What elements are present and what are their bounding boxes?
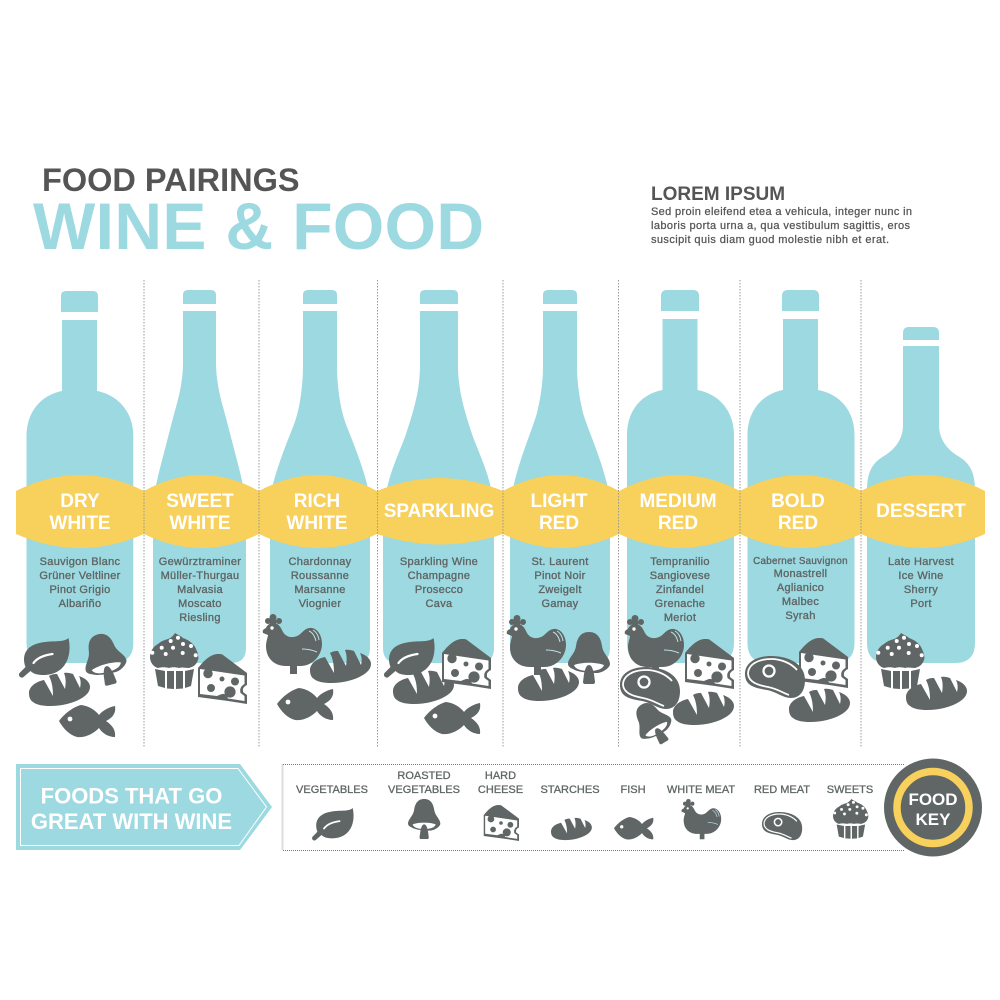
icon: roasted vegetables	[568, 632, 610, 684]
icon: vegetables	[19, 638, 70, 678]
label: WHITE MEAT	[667, 784, 735, 796]
ribbon	[16, 475, 144, 548]
wine list: Sauvigon Blanc	[40, 556, 121, 568]
ribbon label: WHITE	[169, 513, 231, 534]
icon: fish	[277, 688, 333, 720]
icon: red meat	[745, 656, 805, 698]
ribbon	[740, 475, 861, 548]
ribbon	[503, 475, 619, 548]
wine list: Malvasia	[177, 584, 223, 596]
icon: hen	[681, 799, 721, 839]
icon: fish	[614, 817, 653, 840]
icon: leaf	[312, 808, 354, 841]
icon: white meat	[507, 615, 566, 675]
label: CHEESE	[478, 784, 523, 796]
label: FISH	[620, 784, 646, 796]
wine list: Zweigelt	[538, 584, 582, 596]
panel: bold red	[740, 290, 861, 722]
ribbon label: DESSERT	[876, 501, 966, 522]
wine list: Malbec	[782, 596, 819, 608]
wine list: Roussanne	[291, 570, 349, 582]
ribbon label: SPARKLING	[384, 501, 494, 522]
wine list: Zinfandel	[656, 584, 704, 596]
bottle	[627, 290, 734, 663]
ribbon	[144, 475, 259, 548]
key item: roasted vegetables	[388, 770, 460, 839]
icon: hard cheese	[198, 654, 247, 704]
wine list: Port	[910, 598, 932, 610]
key item: starches	[540, 784, 600, 840]
icon: hard cheese	[442, 639, 491, 689]
wine list: Albariño	[59, 598, 101, 610]
wine list: Ice Wine	[898, 570, 944, 582]
ribbon label: RICH	[294, 491, 340, 512]
key item: white meat	[667, 784, 735, 839]
wine list: Riesling	[179, 612, 221, 624]
wine list: Syrah	[785, 610, 816, 622]
arrow text: FOODS THAT GO	[41, 784, 222, 808]
panel: sweet white	[144, 290, 259, 704]
wine list: Sherry	[904, 584, 938, 596]
wine list: Meriot	[664, 612, 696, 624]
wine list: Sangiovese	[650, 570, 710, 582]
ribbon label: RED	[778, 513, 818, 534]
icon: muffin	[833, 799, 868, 839]
wine list: Aglianico	[777, 582, 824, 594]
ribbon label: WHITE	[286, 513, 348, 534]
icon: sweets	[876, 633, 924, 689]
badge yellow ring	[897, 772, 969, 844]
panel: food key	[282, 764, 905, 850]
icon: starches	[393, 671, 454, 704]
badge text: KEY	[916, 810, 951, 829]
wine list: Gewürztraminer	[159, 556, 241, 568]
label: ROASTED	[397, 770, 451, 782]
bottle	[383, 290, 494, 663]
icon: white meat	[263, 614, 322, 674]
heading: food pairings: FOOD PAIRINGS	[42, 162, 300, 198]
icon: roasted vegetables	[626, 695, 680, 752]
icon: steak	[762, 812, 802, 840]
bottle	[510, 290, 610, 663]
icon: hard cheese	[685, 639, 734, 689]
wine list: Viognier	[299, 598, 341, 610]
icon: white meat	[625, 615, 684, 675]
arrow inner line	[20, 768, 266, 846]
icon: bread	[551, 818, 592, 840]
key item: hard cheese	[478, 770, 523, 841]
panel: dessert	[861, 327, 985, 710]
panel: light red	[503, 290, 619, 701]
label: STARCHES	[540, 784, 600, 796]
bottle	[26, 291, 133, 663]
arrow shape	[16, 764, 272, 850]
key item: fish	[614, 784, 653, 840]
icon: starches	[789, 689, 850, 722]
key item: sweets	[827, 784, 873, 839]
icon: starches	[518, 668, 579, 701]
icon: cheese	[484, 805, 519, 841]
arrow text: GREAT WITH WINE	[31, 809, 232, 834]
wine list: Late Harvest	[888, 556, 954, 568]
ribbon	[861, 475, 985, 548]
wine list: Cabernet Sauvignon	[753, 556, 848, 567]
wine list: Pinot Noir	[534, 570, 586, 582]
intro paragraph: Sed proin eleifend etea a vehicula, integer nunc in	[651, 206, 912, 218]
ribbon	[259, 475, 377, 548]
text block: lorem ipsum	[651, 184, 912, 246]
bottle	[153, 290, 246, 663]
icon: starches	[673, 692, 734, 725]
wine list: Pinot Grigio	[49, 584, 111, 596]
wine list: Müller-Thurgau	[161, 570, 239, 582]
icon: starches	[310, 650, 371, 683]
panel: dry white	[16, 291, 144, 737]
ribbon label: MEDIUM	[639, 491, 717, 512]
icon: fish	[424, 702, 480, 734]
icon: starches	[29, 673, 90, 706]
bottle	[867, 327, 975, 663]
icon: hard cheese	[799, 638, 848, 688]
intro paragraph: laboris porta urna a, qua vestibulum sagittis, eros	[651, 220, 910, 232]
icon: red meat	[620, 667, 680, 709]
icon: roasted vegetables	[77, 629, 132, 690]
wine list: Marsanne	[294, 584, 346, 596]
bottle	[270, 290, 370, 663]
icon: starches	[906, 677, 967, 710]
label: SWEETS	[827, 784, 873, 796]
ribbon label: SWEET	[166, 491, 234, 512]
wine list: Sparkling Wine	[400, 556, 478, 568]
label: RED MEAT	[754, 784, 810, 796]
label: HARD	[485, 770, 516, 782]
arrow banner: foods that go great with wine	[16, 764, 272, 850]
wine list: Champagne	[408, 570, 470, 582]
wine list: Chardonnay	[289, 556, 352, 568]
wine list: Monastrell	[774, 568, 827, 580]
wine list: Gamay	[542, 598, 579, 610]
title: wine and food: WINE & FOOD	[33, 189, 484, 263]
icon: fish	[59, 705, 115, 737]
panel: medium red	[619, 290, 740, 752]
panel: rich white	[259, 290, 377, 720]
ribbon	[377, 478, 503, 544]
label: VEGETABLES	[388, 784, 460, 796]
wine list: Tempranilio	[650, 556, 710, 568]
icon: vegetables	[384, 638, 435, 678]
ribbon label: WHITE	[49, 513, 111, 534]
key item: red meat	[754, 784, 810, 840]
key frame	[282, 764, 905, 850]
icon: sweets	[150, 633, 198, 689]
key item: vegetables	[296, 784, 368, 841]
ribbon label: BOLD	[771, 491, 825, 512]
panel: sparkling	[377, 290, 503, 734]
wine list: Grüner Veltliner	[39, 570, 121, 582]
wine list: Cava	[426, 598, 453, 610]
label: VEGETABLES	[296, 784, 368, 796]
wine list: Prosecco	[415, 584, 463, 596]
badge text: FOOD	[908, 790, 958, 809]
intro heading: LOREM IPSUM	[651, 184, 785, 205]
ribbon label: RED	[658, 513, 698, 534]
wine list: Moscato	[178, 598, 222, 610]
ribbon	[619, 475, 740, 548]
ribbon label: DRY	[60, 491, 100, 512]
wine list: St. Laurent	[531, 556, 589, 568]
ribbon label: RED	[539, 513, 579, 534]
intro paragraph: suscipit quis diam guod molestie nibh et erat.	[651, 234, 889, 246]
badge: food key	[884, 758, 982, 856]
bottle	[748, 290, 854, 663]
icon: mushroom	[408, 799, 440, 839]
badge outer ring	[884, 758, 982, 856]
ribbon label: LIGHT	[530, 491, 588, 512]
wine list: Grenache	[655, 598, 705, 610]
